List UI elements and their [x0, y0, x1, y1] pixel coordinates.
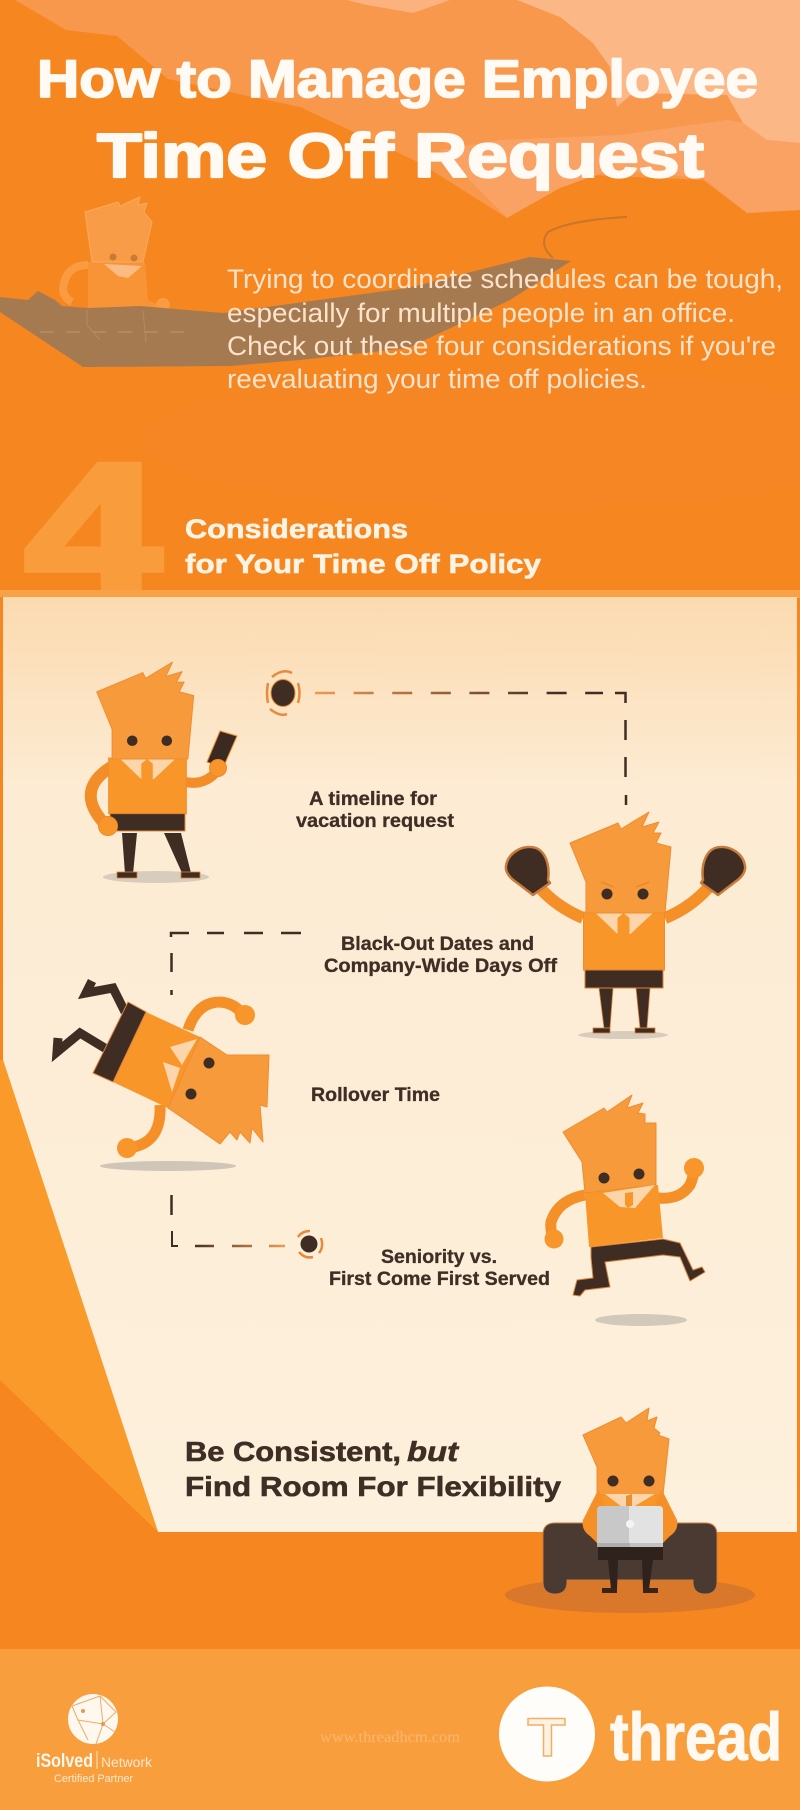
label: seniority: Seniority vs. [381, 1247, 497, 1268]
label: rollover time: Rollover Time [311, 1085, 440, 1106]
dashed connector 1 with target [267, 671, 626, 805]
illustration: road [0, 217, 627, 367]
intro text: Trying to coordinate schedules can be tough, [227, 264, 783, 294]
panel: considerations [0, 590, 800, 1532]
closing heading: Be Consistent, [185, 1436, 401, 1467]
closing heading: but [407, 1436, 460, 1467]
website url: www.threadhcm.com [320, 1729, 460, 1746]
label: black-out dates [324, 934, 558, 977]
character: phone [91, 662, 237, 883]
intro text [227, 264, 783, 394]
intro text: reevaluating your time off policies. [227, 364, 647, 394]
closing heading: Find Room For Flexibility [185, 1471, 561, 1502]
intro text: Check out these four considerations if you're [227, 331, 776, 361]
footer band [0, 1649, 800, 1810]
character: boxer [506, 812, 745, 1039]
header mountains [15, 0, 800, 510]
label: seniority [329, 1247, 550, 1290]
title [37, 50, 758, 191]
label: black-out dates: Company-Wide Days Off [324, 956, 558, 977]
dashed connector 2 [171, 933, 301, 995]
logo: thread [499, 1686, 782, 1782]
logo: iSolved network [36, 1694, 152, 1785]
character: on sofa with laptop [505, 1408, 755, 1613]
logo: iSolved network: iSolved [36, 1751, 93, 1772]
logo: iSolved network: Certified Partner [54, 1773, 133, 1785]
character: jumping [544, 1095, 705, 1326]
section heading: Considerations [185, 514, 408, 544]
label: timeline: vacation request [296, 811, 455, 832]
closing heading [185, 1436, 561, 1502]
illustration: faded character on road [63, 197, 170, 316]
logo: iSolved network: Network [101, 1755, 152, 1770]
big number 4: 4 [25, 425, 161, 637]
title: How to Manage Employee [37, 50, 758, 109]
label: timeline [296, 789, 455, 832]
character: falling [57, 981, 269, 1171]
section heading: for Your Time Off Policy [185, 549, 541, 579]
title: Time Off Request [97, 122, 704, 191]
label: seniority: First Come First Served [329, 1269, 550, 1290]
section heading [185, 514, 541, 579]
intro text: especially for multiple people in an office. [227, 298, 735, 328]
label: timeline: A timeline for [309, 789, 438, 810]
dashed connector 3 with target [172, 1195, 322, 1257]
label: black-out dates: Black-Out Dates and [341, 934, 534, 955]
